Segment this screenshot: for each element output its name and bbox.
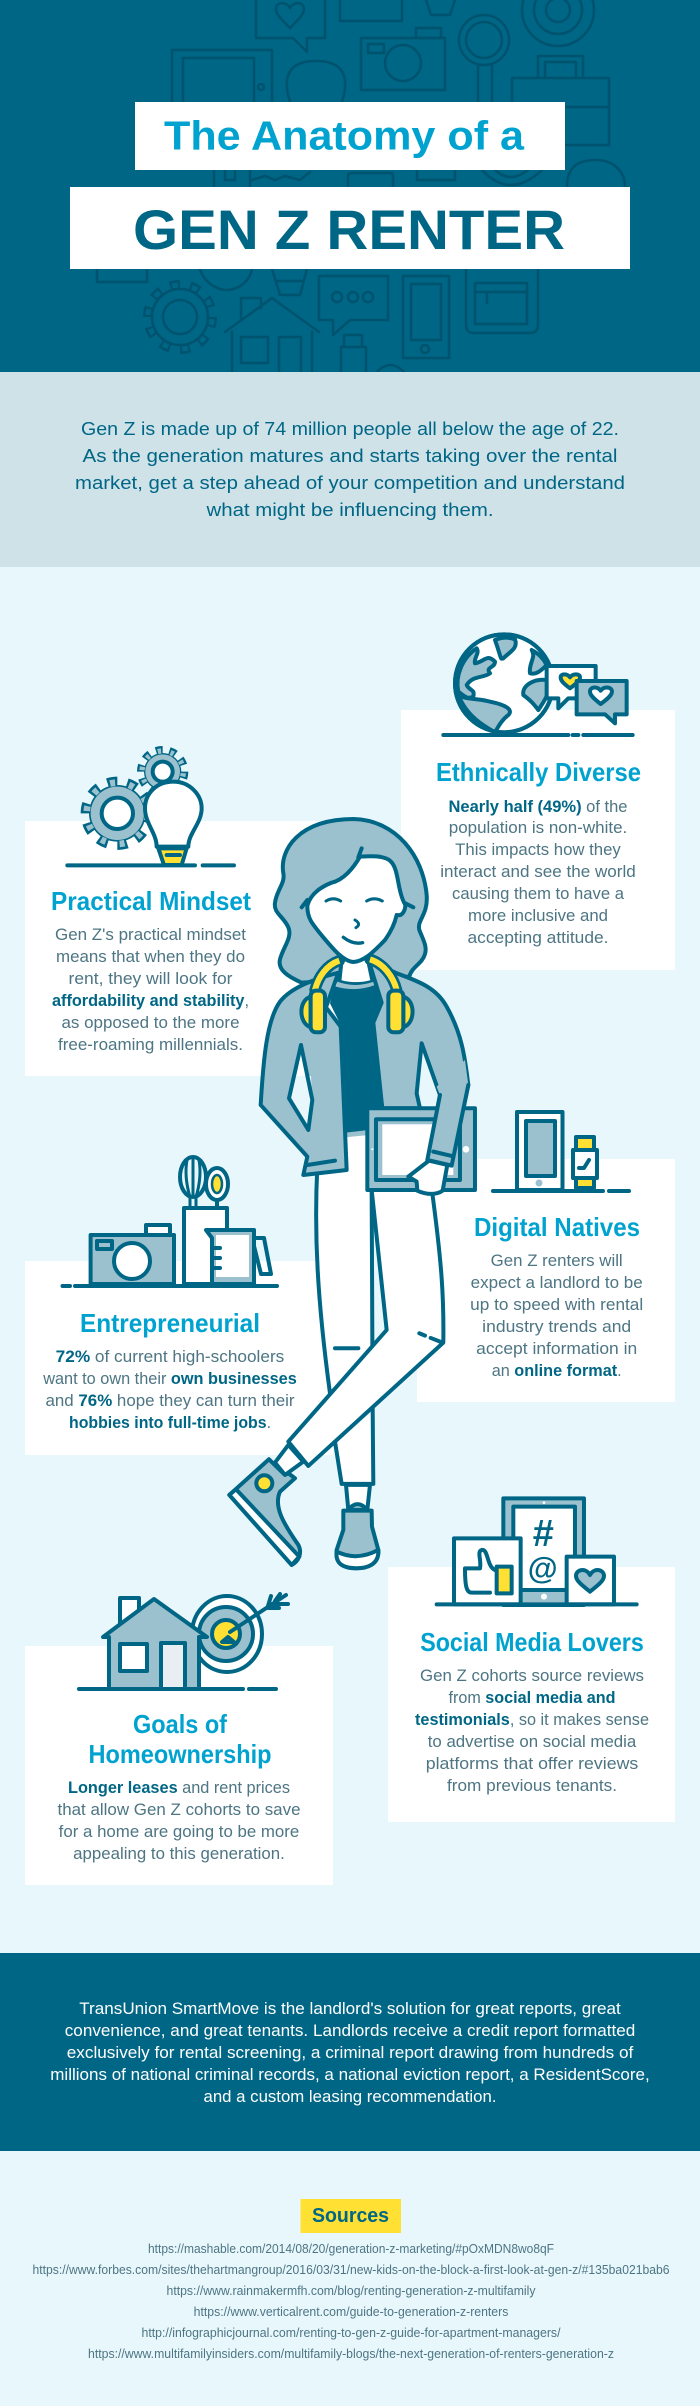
icon: gears and light bulb <box>67 751 234 865</box>
intro band <box>0 372 700 567</box>
panel: digital natives <box>417 1112 675 1402</box>
body text: from previous tenants. <box>447 1777 617 1795</box>
body text <box>52 926 249 1054</box>
body text: from social media and <box>448 1689 616 1707</box>
intro band: what might be influencing them. <box>205 500 493 520</box>
neck <box>339 958 373 984</box>
body text: expect a landlord to be <box>471 1274 643 1292</box>
hair <box>275 819 427 983</box>
trailing leg <box>316 1133 378 1568</box>
heading: Entrepreneurial <box>80 1308 260 1338</box>
body text: accepting attitude. <box>468 929 608 947</box>
body text: up to speed with rental <box>470 1296 643 1314</box>
body text: Nearly half (49%) of the <box>448 798 628 816</box>
body text: as opposed to the more <box>62 1014 240 1032</box>
icon: tablet, thumbs up and heart cards <box>437 1498 637 1605</box>
background icon pattern <box>97 0 625 372</box>
panel: ethnically diverse <box>401 634 675 970</box>
front leg <box>229 1133 443 1565</box>
body text: 72% of current high-schoolers <box>56 1348 284 1366</box>
icon: tablet, thumbs up and heart cards: @ <box>528 1551 558 1585</box>
body text: platforms that offer reviews <box>426 1755 638 1773</box>
body text <box>470 1252 643 1380</box>
heading: Ethnically Diverse <box>436 757 641 787</box>
title box <box>135 102 565 170</box>
heading: Practical Mindset <box>51 886 251 916</box>
body text: accept information in <box>476 1340 637 1358</box>
panel: entrepreneurial <box>25 1157 333 1455</box>
body text <box>415 1667 649 1795</box>
hand <box>408 1161 447 1194</box>
sources heading <box>300 2199 401 2233</box>
sources heading: Sources <box>312 2205 389 2227</box>
sources list: https://www.verticalrent.com/guide-to-generation-z-renters <box>194 2304 509 2319</box>
panel: TransUnion SmartMove: exclusively for rental screening, a criminal report drawing from hundreds of <box>67 2043 634 2062</box>
subtitle box <box>70 187 630 269</box>
body text: Longer leases and rent prices <box>68 1779 290 1797</box>
top <box>330 982 383 1133</box>
heading: Social Media Lovers <box>420 1627 644 1657</box>
illustration: young woman with headphones and tablet <box>229 819 475 1568</box>
body text <box>440 798 636 947</box>
jacket left <box>261 973 347 1175</box>
icon: phone and smartwatch <box>493 1112 629 1191</box>
sources list: https://mashable.com/2014/08/20/generation-z-marketing/#pOxMDN8wo8qF <box>148 2241 554 2256</box>
body text: want to own their own businesses <box>42 1370 297 1388</box>
body text <box>58 1779 300 1863</box>
panel: TransUnion SmartMove: and a custom leasing recommendation. <box>204 2087 496 2106</box>
sources list: http://infographicjournal.com/renting-to-gen-z-guide-for-apartment-managers/ <box>142 2325 561 2340</box>
body text: and 76% hope they can turn their <box>46 1392 295 1410</box>
body text: causing them to have a <box>452 885 625 903</box>
sources list: https://www.multifamilyinsiders.com/multifamily-blogs/the-next-generation-of-renters-generation-z <box>88 2346 614 2361</box>
body text: free-roaming millennials. <box>58 1036 243 1054</box>
panel: practical mindset <box>25 751 333 1076</box>
body text: Gen Z's practical mindset <box>55 926 246 944</box>
tablet <box>367 1108 475 1190</box>
headphones <box>301 959 413 1032</box>
icon: camera, whisk and measuring cup <box>62 1157 277 1286</box>
panel: TransUnion SmartMove: convenience, and great tenants. Landlords receive a credit report formatted <box>65 2021 635 2040</box>
title line two: GEN Z RENTER <box>133 198 565 261</box>
body text: an online format. <box>492 1362 622 1380</box>
body text: interact and see the world <box>440 863 636 881</box>
body text <box>42 1348 297 1432</box>
heading: Goals of <box>133 1709 227 1739</box>
sources list: https://www.rainmakermfh.com/blog/renting-generation-z-multifamily <box>166 2283 536 2298</box>
heading: Digital Natives <box>474 1212 640 1242</box>
panel: social media lovers <box>388 1498 675 1822</box>
body text: more inclusive and <box>468 907 608 925</box>
body text: industry trends and <box>482 1318 631 1336</box>
intro band: Gen Z is made up of 74 million people all below the age of 22. <box>81 419 619 439</box>
header banner <box>0 0 700 372</box>
heading <box>88 1709 272 1769</box>
body text: Gen Z renters will <box>491 1252 623 1270</box>
body text: to advertise on social media <box>428 1733 637 1751</box>
intro band: As the generation matures and starts taking over the rental <box>82 446 618 466</box>
body text: affordability and stability, <box>52 992 249 1010</box>
body text: for a home are going to be more <box>59 1823 299 1841</box>
panel: TransUnion SmartMove <box>0 1953 700 2151</box>
body text: testimonials, so it makes sense <box>415 1711 649 1729</box>
body text: means that when they do <box>56 948 245 966</box>
body text: that allow Gen Z cohorts to save <box>58 1801 300 1819</box>
body text: population is non-white. <box>449 819 627 837</box>
jacket right <box>368 959 468 1166</box>
jacket sleeve <box>427 1060 468 1166</box>
panel: TransUnion SmartMove: millions of national criminal records, a national eviction report, a ResidentScore, <box>50 2065 650 2084</box>
body text: Gen Z cohorts source reviews <box>420 1667 644 1685</box>
sources list <box>32 2241 670 2361</box>
icon: tablet, thumbs up and heart cards: # <box>533 1513 554 1555</box>
body text: This impacts how they <box>455 841 622 859</box>
face <box>302 848 413 962</box>
panel: goals of homeownership <box>25 1594 333 1885</box>
body text: hobbies into full-time jobs. <box>69 1414 271 1432</box>
body text: rent, they will look for <box>68 970 233 988</box>
sources list: https://www.forbes.com/sites/thehartmangroup/2016/03/31/new-kids-on-the-block-a-first-look-at-gen-z/#135ba021bab6 <box>32 2262 670 2277</box>
panel: TransUnion SmartMove: TransUnion SmartMove is the landlord's solution for great reports, great <box>79 1999 621 2018</box>
title line one: The Anatomy of a <box>164 112 525 158</box>
heading: Homeownership <box>88 1739 272 1769</box>
icon: house and target with arrow <box>79 1594 288 1689</box>
body text: appealing to this generation. <box>73 1845 285 1863</box>
icon: globe and speech bubbles <box>443 634 633 735</box>
intro band: market, get a step ahead of your competition and understand <box>75 473 625 493</box>
